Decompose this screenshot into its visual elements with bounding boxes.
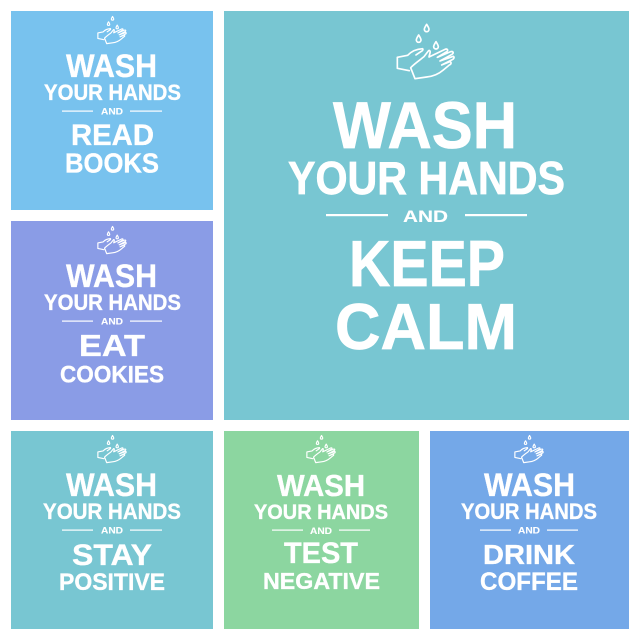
text: and: AND (101, 526, 124, 536)
icon: washing hands (98, 226, 126, 254)
text: drink: DRINK (483, 539, 575, 570)
panel: test negative (224, 431, 419, 629)
text: your hands: YOUR HANDS (288, 152, 565, 204)
heading: wash: WASH (66, 48, 157, 84)
text: stay: STAY (72, 539, 152, 572)
text: coffee: COFFEE (480, 568, 578, 596)
text: your hands: YOUR HANDS (43, 499, 181, 524)
text: and: AND (101, 316, 124, 326)
text: calm: CALM (335, 290, 517, 363)
text: and: AND (518, 526, 541, 536)
panel: eat cookies (11, 221, 213, 420)
icon: washing hands (515, 435, 543, 463)
text: your hands: YOUR HANDS (461, 499, 597, 524)
text: positive: POSITIVE (59, 569, 165, 596)
icon: washing hands (397, 24, 454, 79)
heading: wash: WASH (66, 467, 157, 503)
panel: read books (11, 11, 213, 210)
panel: stay positive (11, 431, 213, 629)
heading: wash: WASH (484, 467, 575, 503)
heading: wash: WASH (277, 468, 365, 503)
text: negative: NEGATIVE (263, 568, 380, 594)
text: test: TEST (284, 537, 358, 570)
text: your hands: YOUR HANDS (44, 80, 181, 105)
icon: washing hands (307, 435, 335, 463)
icon: washing hands (98, 16, 126, 44)
text: books: BOOKS (65, 148, 159, 178)
heading: wash: WASH (333, 88, 517, 162)
text: cookies: COOKIES (60, 362, 164, 388)
panel: keep calm (224, 11, 629, 420)
text: your hands: YOUR HANDS (254, 501, 388, 524)
text: your hands: YOUR HANDS (44, 290, 181, 315)
text: and: AND (403, 207, 448, 226)
heading: wash: WASH (66, 258, 157, 294)
text: keep: KEEP (349, 227, 505, 300)
panel: drink coffee (430, 431, 629, 629)
text: eat: EAT (79, 328, 145, 363)
text: and: AND (310, 526, 333, 536)
text: read: READ (71, 119, 154, 152)
text: and: AND (101, 106, 124, 116)
icon: washing hands (98, 435, 126, 463)
